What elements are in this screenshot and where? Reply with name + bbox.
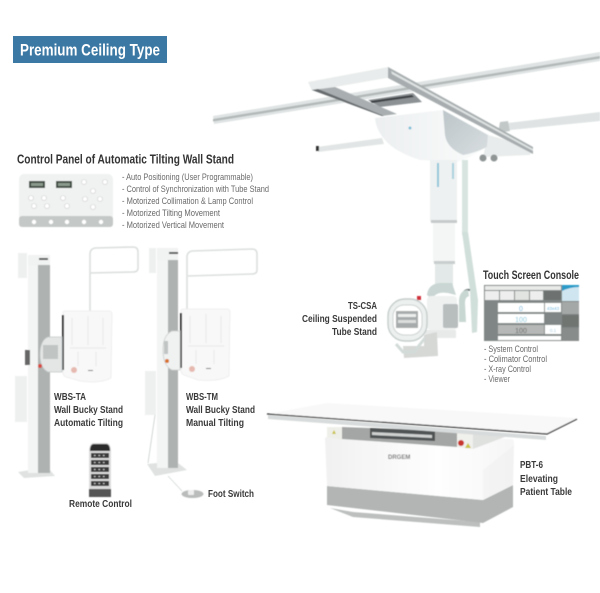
label: WBS-TA: Wall Bucky Stand (54, 404, 123, 416)
touch screen feature list: - System Control (484, 344, 538, 355)
label: TS-CSA (302, 300, 377, 338)
dome housing (375, 110, 488, 162)
label: PBT-6: Elevating (520, 473, 558, 485)
touch screen console illustration (484, 285, 579, 341)
control panel feature list (122, 172, 269, 231)
foot switch icon (168, 476, 204, 498)
label: remote control: Remote Control (69, 498, 132, 510)
ceiling rails (213, 52, 600, 152)
control panel feature list: - Auto Positioning (User Programmable) (122, 172, 253, 183)
touch screen feature list: - Colimator Control (484, 354, 547, 365)
touch screen console illustration: 43x43 (547, 306, 560, 311)
heading: control panel: Control Panel of Automatic Tilting Wall Stand (17, 152, 234, 166)
title banner: Premium Ceiling Type (20, 42, 160, 60)
label: foot switch: Foot Switch (208, 488, 254, 500)
label: TS-CSA: TS-CSA (348, 300, 377, 312)
ceiling suspended tube stand product (213, 52, 600, 358)
label: WBS-TA: WBS-TA (54, 391, 86, 403)
label: WBS-TM: WBS-TM (186, 391, 218, 403)
touch screen feature list: - Viewer (484, 374, 510, 385)
control panel feature list: - Control of Synchronization with Tube Stand (122, 184, 269, 195)
remote control icon (89, 443, 111, 497)
label: WBS-TM (186, 391, 255, 429)
label: WBS-TM: Manual Tilting (186, 417, 244, 429)
touch screen feature list (484, 344, 547, 385)
sliding frame (308, 67, 533, 162)
label: PBT-6: PBT-6 (520, 459, 543, 471)
control panel feature list: - Motorized Tilting Movement (122, 208, 220, 219)
elevating patient table (267, 403, 577, 527)
tube head (388, 283, 470, 358)
label: WBS-TA: Automatic Tilting (54, 417, 123, 429)
wall bucky stand WBS-TM (145, 248, 257, 476)
control panel illustration (19, 174, 113, 227)
touch screen feature list: - X-ray Control (484, 364, 531, 375)
table base (325, 436, 514, 527)
label: PBT-6: Patient Table (520, 486, 572, 498)
label: WBS-TM: Wall Bucky Stand (186, 404, 255, 416)
wall bucky stand WBS-TA (15, 247, 138, 478)
label: PBT-6 (520, 459, 572, 498)
title banner (13, 36, 167, 63)
touch screen console illustration: 100 (515, 328, 527, 335)
table top (267, 403, 577, 440)
control panel feature list: - Motorized Vertical Movement (122, 220, 224, 231)
table base: DRGEM (388, 455, 410, 461)
touch screen console illustration: 100 (515, 317, 527, 324)
label: TS-CSA: Tube Stand (332, 326, 377, 338)
table carriage (327, 427, 505, 449)
telescopic column (430, 160, 478, 333)
label: TS-CSA: Ceiling Suspended (302, 313, 377, 325)
touch screen console illustration: 0.1 (550, 328, 557, 333)
touch screen console illustration: 0 (519, 306, 523, 313)
label: WBS-TA (54, 391, 123, 429)
control panel feature list: - Motorized Collimation & Lamp Control (122, 196, 253, 207)
